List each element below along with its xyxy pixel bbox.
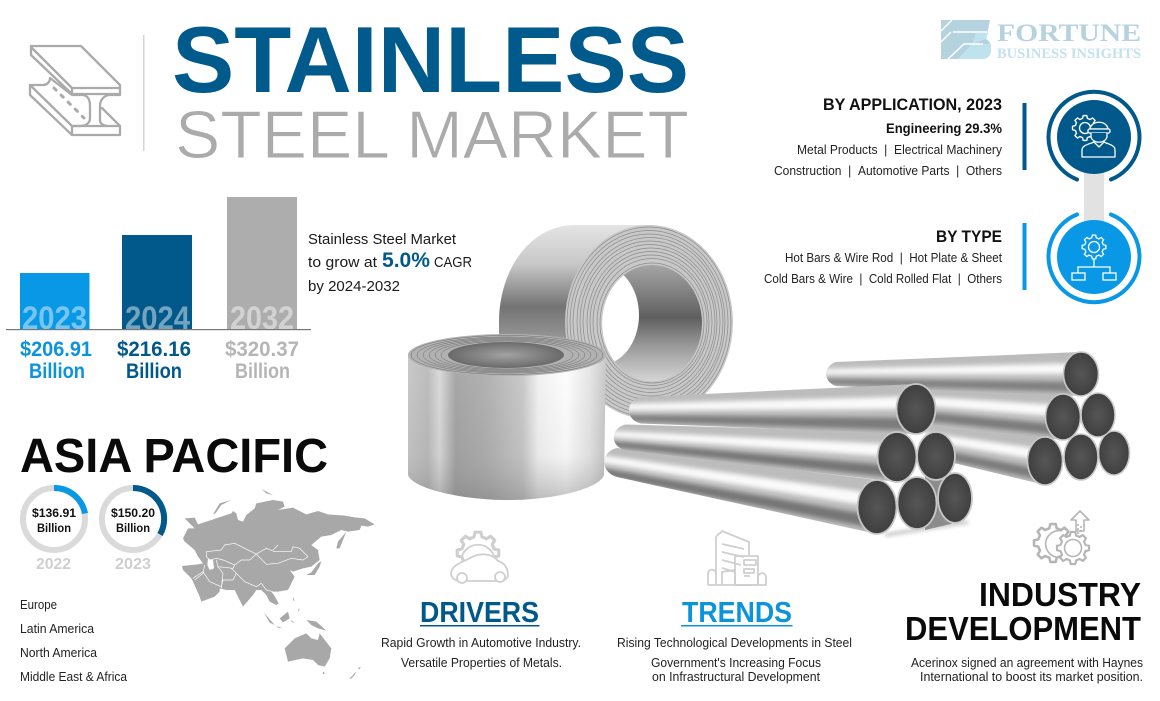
- region list: Latin America: [20, 622, 94, 636]
- logo: Fortune Business Insights: [941, 20, 1141, 62]
- donut: 2022: $136.91: [32, 506, 76, 520]
- body text: on Infrastructural Development: [652, 670, 821, 684]
- body text: Versatile Properties of Metals.: [401, 656, 562, 670]
- panel: by type: [764, 228, 1002, 286]
- icon: steel I-beam: [30, 46, 120, 135]
- CAGR text: to grow at: [308, 255, 377, 271]
- front coil: [408, 334, 606, 500]
- panel: trends: [617, 531, 852, 684]
- donut: 2023: 2023: [115, 556, 151, 573]
- bar chart: market size: [6, 197, 311, 383]
- heading: Asia Pacific: ASIA PACIFIC: [20, 430, 328, 483]
- value 2032: $320.37: [225, 338, 299, 361]
- bar 2023: 2023: [22, 300, 87, 336]
- donut: 2022: Billion: [37, 521, 71, 535]
- pipe: top: [629, 384, 910, 434]
- region list: North America: [20, 646, 97, 660]
- connector: [1084, 172, 1104, 222]
- pipe: back lower: [925, 424, 1040, 483]
- icon: gears with arrow: [1034, 511, 1089, 564]
- panel: drivers: [381, 532, 581, 670]
- logo: Fortune Business Insights: BUSINESS INSIGHTS: [997, 46, 1141, 62]
- CAGR text: 5.0%: [382, 249, 430, 272]
- body text: Government's Increasing Focus: [651, 656, 821, 670]
- heading: BY TYPE: [936, 228, 1002, 246]
- heading: [905, 576, 1141, 647]
- donut: 2023: Billion: [116, 521, 150, 535]
- title: STAINLESS: [172, 7, 689, 112]
- value 2023: $206.91: [20, 338, 92, 361]
- segment list: Hot Bars & Wire Rod | Hot Plate & Sheet: [785, 251, 1002, 265]
- body text: Rapid Growth in Automotive Industry.: [381, 636, 581, 650]
- heading: DEVELOPMENT: [905, 610, 1141, 647]
- illustration: front pipe stack: [594, 382, 972, 537]
- donut: 2022: 2022: [36, 556, 71, 573]
- pipe: lower: [604, 448, 873, 532]
- icon: engineer badge: [1049, 92, 1140, 180]
- bar 2032: [227, 197, 297, 336]
- value 2032: [225, 338, 299, 383]
- pipe: middle: [614, 424, 889, 481]
- value 2032: Billion: [235, 360, 290, 383]
- body text: Rising Technological Developments in Steel: [617, 636, 852, 650]
- value 2024: [117, 338, 191, 383]
- value 2024: Billion: [126, 360, 182, 383]
- heading: INDUSTRY: [979, 576, 1141, 613]
- segment list: [764, 251, 1002, 286]
- value 2023: Billion: [29, 360, 85, 383]
- body text: [617, 636, 852, 684]
- logo: Fortune Business Insights: FORTUNE: [997, 20, 1141, 47]
- Caspian Sea: [207, 559, 214, 570]
- divider: [143, 35, 144, 151]
- body text: International to boost its market position.: [920, 670, 1143, 684]
- CAGR text: CAGR: [434, 255, 472, 271]
- bar 2023: [20, 273, 90, 336]
- segment list: Cold Bars & Wire | Cold Rolled Flat | Others: [764, 272, 1002, 286]
- donut: 2023: $150.20: [111, 506, 155, 520]
- body text: [911, 656, 1143, 684]
- segment list: Metal Products | Electrical Machinery: [797, 143, 1003, 157]
- icon: car and gear: [451, 532, 508, 583]
- region list: Europe: [20, 598, 57, 612]
- region list: [20, 598, 127, 684]
- value 2024: $216.16: [117, 338, 191, 361]
- heading: TRENDS: [682, 597, 792, 629]
- illustration: steel coils: [408, 225, 733, 500]
- pipe ends: [1028, 352, 1130, 485]
- bar 2024: [122, 235, 192, 336]
- segment list: Construction | Automotive Parts | Others: [774, 164, 1002, 178]
- body text: Acerinox signed an agreement with Haynes: [911, 656, 1143, 670]
- CAGR text: [308, 232, 472, 295]
- back coil: [499, 225, 733, 419]
- bar 2032: 2032: [230, 300, 294, 336]
- CAGR text: by 2024-2032: [308, 279, 400, 295]
- icon: gear hierarchy badge: [1049, 214, 1140, 302]
- title: [172, 7, 689, 173]
- pipe: back top: [826, 352, 1076, 396]
- value 2023: [20, 338, 92, 383]
- leading segment: Engineering 29.3%: [886, 121, 1002, 136]
- segment list: [774, 143, 1003, 178]
- map: Asia Pacific: [182, 489, 375, 679]
- illustration: back pipe stack: [816, 350, 1130, 490]
- pipe: back middle: [930, 390, 1057, 440]
- panel: by application: [774, 96, 1003, 178]
- CAGR text: Stainless Steel Market: [308, 232, 456, 248]
- panel: industry development: [905, 511, 1143, 684]
- heading: BY APPLICATION, 2023: [823, 96, 1002, 114]
- heading: DRIVERS: [420, 597, 539, 629]
- bar 2024: 2024: [125, 300, 190, 336]
- title: STEEL MARKET: [175, 97, 689, 173]
- donut: 2023: [102, 488, 164, 573]
- pipe ends: [858, 384, 972, 534]
- donut: 2022: [23, 488, 85, 573]
- body text: [381, 636, 581, 670]
- icon: buildings: [708, 531, 766, 585]
- region list: Middle East & Africa: [20, 670, 127, 684]
